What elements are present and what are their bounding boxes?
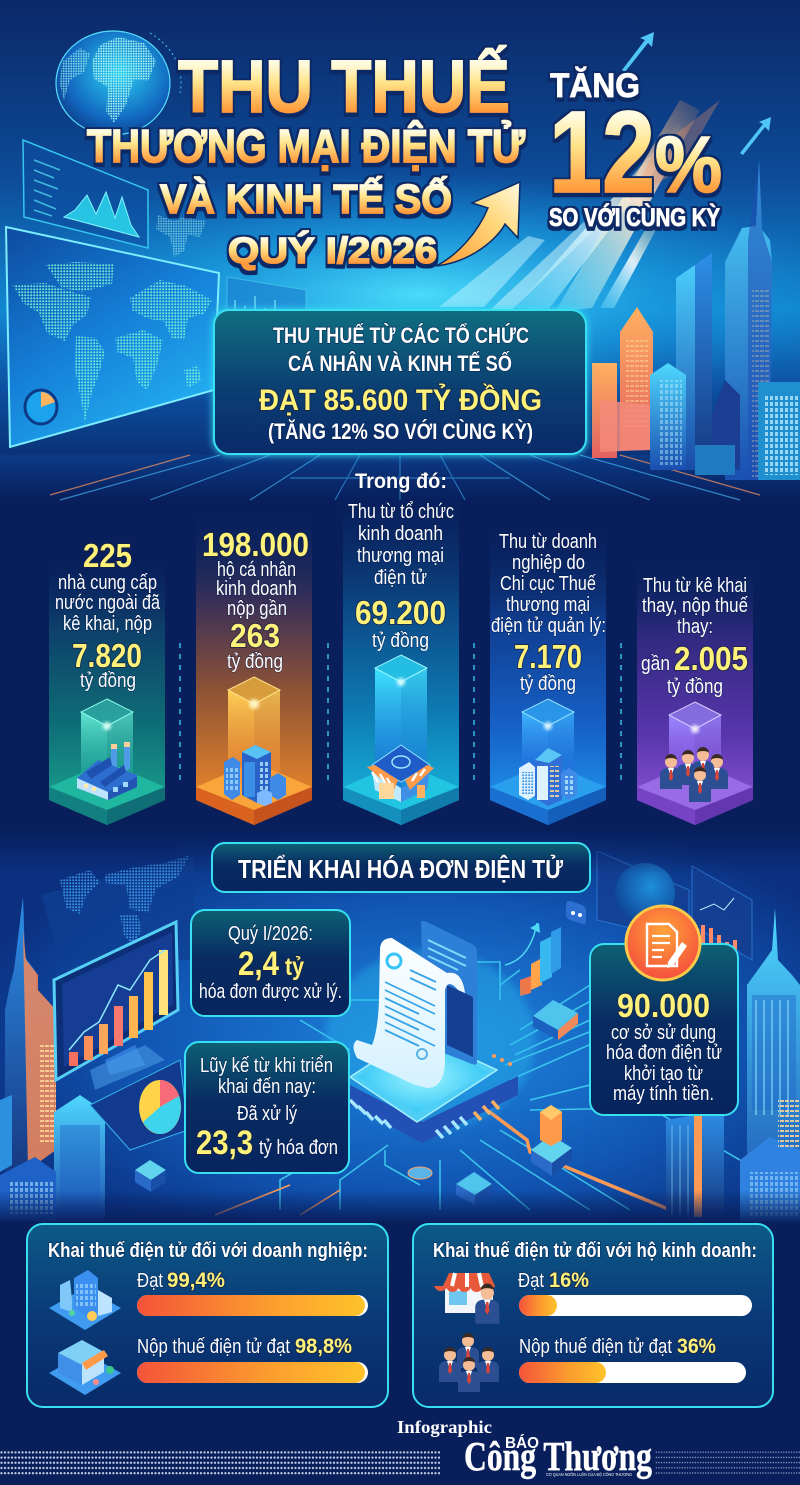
icon: iso store	[49, 1340, 121, 1395]
icon: crystal column cyan	[375, 655, 427, 790]
light rays	[439, 100, 720, 312]
dividers	[180, 643, 621, 780]
icon: processor chip with invoice	[325, 950, 535, 1143]
logo: Infographic Báo Công Thương: BÁO	[505, 1433, 539, 1452]
icon: floating data panels	[566, 851, 752, 960]
icon: four people	[439, 1333, 499, 1392]
title: VÀ KINH TẾ SỐ	[160, 176, 452, 222]
icon: group of people	[660, 747, 728, 802]
bar: household filing 16%	[519, 1295, 752, 1316]
panel: column 3 e-commerce organisations: kinh doanh	[358, 523, 443, 545]
panel: column 3 e-commerce organisations: 69.200	[355, 594, 446, 631]
panel: cumulative invoices: tỷ hóa đơn	[259, 1137, 338, 1159]
panel: cumulative invoices: Đã xử lý	[237, 1103, 297, 1125]
left cityscape	[0, 897, 105, 1222]
chart monitor	[54, 922, 178, 1090]
panel: column 1 foreign suppliers: kê khai, nộp	[63, 613, 152, 635]
panel: world map screen	[6, 227, 306, 447]
map panel	[41, 855, 194, 960]
icon: buildings orange scene	[224, 745, 286, 806]
icon: crystal column teal	[81, 699, 133, 790]
callout: growth 12%: TĂNG	[550, 67, 640, 105]
background: hero scene	[0, 0, 800, 500]
circuit traces	[215, 950, 740, 1218]
right cityscape	[666, 908, 800, 1222]
icon: growth arrow	[436, 182, 520, 266]
logo: Infographic Báo Công Thương: Công Thương	[464, 1433, 652, 1479]
panel: household e-filing: 36%	[677, 1335, 716, 1358]
panel: quarter invoices	[191, 910, 350, 1016]
background: e-invoice tech scene	[0, 830, 800, 1222]
panel: cash register invoices: 90.000	[617, 987, 710, 1024]
panel: quarter invoices: Quý I/2026:	[228, 923, 313, 945]
footer dot strips	[0, 1450, 800, 1476]
panel: column 2 households: 263	[230, 617, 280, 654]
icon: shop owner	[434, 1273, 499, 1324]
bar: household payment 36%	[519, 1362, 746, 1383]
panel: column 2 households: kinh doanh	[216, 578, 297, 600]
city skyline	[592, 160, 800, 480]
icon: crystal column blue	[522, 699, 574, 790]
icon: storefront	[367, 745, 434, 802]
panel: small regional map	[156, 215, 206, 257]
panel: cumulative invoices	[185, 1042, 349, 1173]
panel: quarter invoices: 2,4	[238, 945, 279, 983]
panel: household e-filing	[413, 1224, 773, 1407]
panel: column 3 e-commerce organisations: tỷ đồng	[372, 630, 429, 652]
icon: crystal column orange	[228, 677, 280, 790]
panel: column 5 withholding: thay, nộp thuế	[642, 595, 748, 617]
icon: mini bar chart	[505, 923, 561, 996]
panel: cumulative invoices: 23,3	[196, 1124, 253, 1162]
icon: small arrow right	[740, 117, 771, 155]
panel: column 5 withholding: tỷ đồng	[667, 676, 723, 698]
heading: e-invoice section: TRIỂN KHAI HÓA ĐƠN ĐIỆN TỬ	[238, 853, 563, 884]
panel: enterprise e-filing: Đạt	[137, 1270, 163, 1292]
panel: household e-filing: 16%	[549, 1269, 589, 1292]
panel: column 3 e-commerce organisations	[343, 490, 459, 825]
panel: enterprise e-filing	[27, 1224, 388, 1407]
bar: enterprise filing 99.4%	[137, 1295, 368, 1316]
panel: column 5 withholding: thay:	[677, 616, 713, 638]
panel: column 4 enterprises: thương mại	[506, 594, 590, 616]
panel: column 2 households: tỷ đồng	[227, 651, 283, 673]
panel: column 4 enterprises	[490, 527, 606, 825]
panel: column 1 foreign suppliers	[49, 537, 165, 825]
icon: small chips and node blocks	[135, 1000, 578, 1205]
panel: column 4 enterprises: nghiệp do	[512, 552, 585, 574]
icon: crystal column violet	[669, 702, 721, 790]
panel: column 5 withholding: 2.005	[674, 640, 748, 677]
callout: growth 12%	[549, 67, 722, 232]
panel: column 3 e-commerce organisations: điện tử	[374, 567, 427, 589]
scene edge fades	[0, 828, 800, 1224]
panel: chart screen	[23, 140, 148, 248]
logo: Infographic Báo Công Thương: Infographic	[397, 1417, 492, 1437]
callout: growth 12%: %	[655, 120, 722, 209]
icon: factory	[77, 742, 137, 800]
icon: office buildings	[49, 1270, 121, 1330]
panel: column 4 enterprises: Chi cục Thuế	[500, 573, 596, 595]
icon: globe	[56, 31, 181, 135]
panel: column 4 enterprises: 7.170	[514, 638, 582, 675]
panel: column 4 enterprises: tỷ đồng	[520, 673, 576, 695]
panel: cash register invoices: cơ sở sử dụng	[611, 1022, 716, 1044]
bar: enterprise payment 98.8%	[137, 1362, 368, 1383]
panel: cash register invoices: hóa đơn điện tử	[606, 1042, 722, 1064]
panel: total collection	[214, 310, 586, 454]
title: THƯƠNG MẠI ĐIỆN TỬ	[87, 120, 526, 172]
panel: quarter invoices: hóa đơn được xử lý.	[199, 981, 342, 1003]
icon: e-invoice document	[354, 921, 477, 1088]
panel: column 2 households: hộ cá nhân	[217, 559, 296, 581]
panel: cash register invoices: máy tính tiền.	[613, 1083, 714, 1105]
callout: growth 12%: 12	[549, 87, 655, 217]
panel: cash register invoices	[590, 906, 738, 1115]
panel: total collection: ĐẠT 85.600 TỶ ĐỒNG	[259, 383, 542, 417]
panel: quarter invoices: tỷ	[285, 953, 304, 981]
pie chart panel	[90, 1060, 188, 1150]
panel: column 1 foreign suppliers: 7.820	[72, 637, 142, 674]
panel: column 2 households	[196, 513, 312, 825]
icon: small arrow top	[622, 32, 654, 72]
panel: cash register invoices: khởi tạo từ	[624, 1063, 703, 1085]
icon: document and pen badge	[626, 906, 700, 980]
panel: total collection: THU THUẾ TỪ CÁC TỔ CHỨC	[273, 323, 529, 348]
panel: column 1 foreign suppliers: nước ngoài đã	[55, 592, 161, 614]
panel: enterprise e-filing: Nộp thuế điện tử đạt	[137, 1336, 290, 1358]
panel: enterprise e-filing: Khai thuế điện tử đối với doanh nghiệp:	[48, 1240, 368, 1262]
panel: total collection: (TĂNG 12% SO VỚI CÙNG KỲ)	[268, 419, 533, 444]
title	[87, 45, 526, 271]
panel: enterprise e-filing: 98,8%	[295, 1335, 352, 1358]
panel: column 5 withholding: gần	[641, 653, 670, 675]
panel: total collection: CÁ NHÂN VÀ KINH TẾ SỐ	[288, 350, 512, 376]
panel: enterprise e-filing: 99,4%	[167, 1269, 225, 1292]
logo: Infographic Báo Công Thương	[397, 1417, 652, 1479]
heading: breakdown: Trong đó:	[355, 470, 447, 493]
panel: column 1 foreign suppliers: tỷ đồng	[80, 670, 136, 692]
heading: e-invoice section	[212, 843, 590, 892]
callout: growth 12%: SO VỚI CÙNG KỲ	[549, 202, 720, 232]
panel: column 1 foreign suppliers: 225	[83, 537, 132, 574]
panel: column 5 withholding	[637, 560, 753, 825]
icon: office towers	[519, 748, 577, 806]
panel: cumulative invoices: khai đến nay:	[218, 1076, 316, 1098]
panel: column 5 withholding: Thu từ kê khai	[643, 575, 747, 597]
panel: household e-filing: Nộp thuế điện tử đạt	[519, 1336, 672, 1358]
panel: cumulative invoices: Lũy kế từ khi triển	[200, 1055, 333, 1077]
panel: column 4 enterprises: Thu từ doanh	[499, 531, 597, 553]
logo: Infographic Báo Công Thương: CƠ QUAN NGÔN LUẬN CỦA BỘ CÔNG THƯƠNG	[546, 1471, 632, 1477]
title: QUÝ I/2026	[228, 230, 437, 271]
panel: column 3 e-commerce organisations: thương mại	[357, 545, 444, 567]
panel: column 2 households: 198.000	[202, 526, 309, 563]
title: THU THUẾ	[178, 45, 510, 128]
panel: household e-filing: Đạt	[518, 1270, 544, 1292]
panel: column 1 foreign suppliers: nhà cung cấp	[58, 572, 157, 594]
panel: column 4 enterprises: điện tử quản lý:	[491, 615, 606, 637]
panel: column 3 e-commerce organisations: Thu từ tổ chức	[348, 501, 454, 523]
panel: column 2 households: nộp gần	[227, 598, 287, 620]
